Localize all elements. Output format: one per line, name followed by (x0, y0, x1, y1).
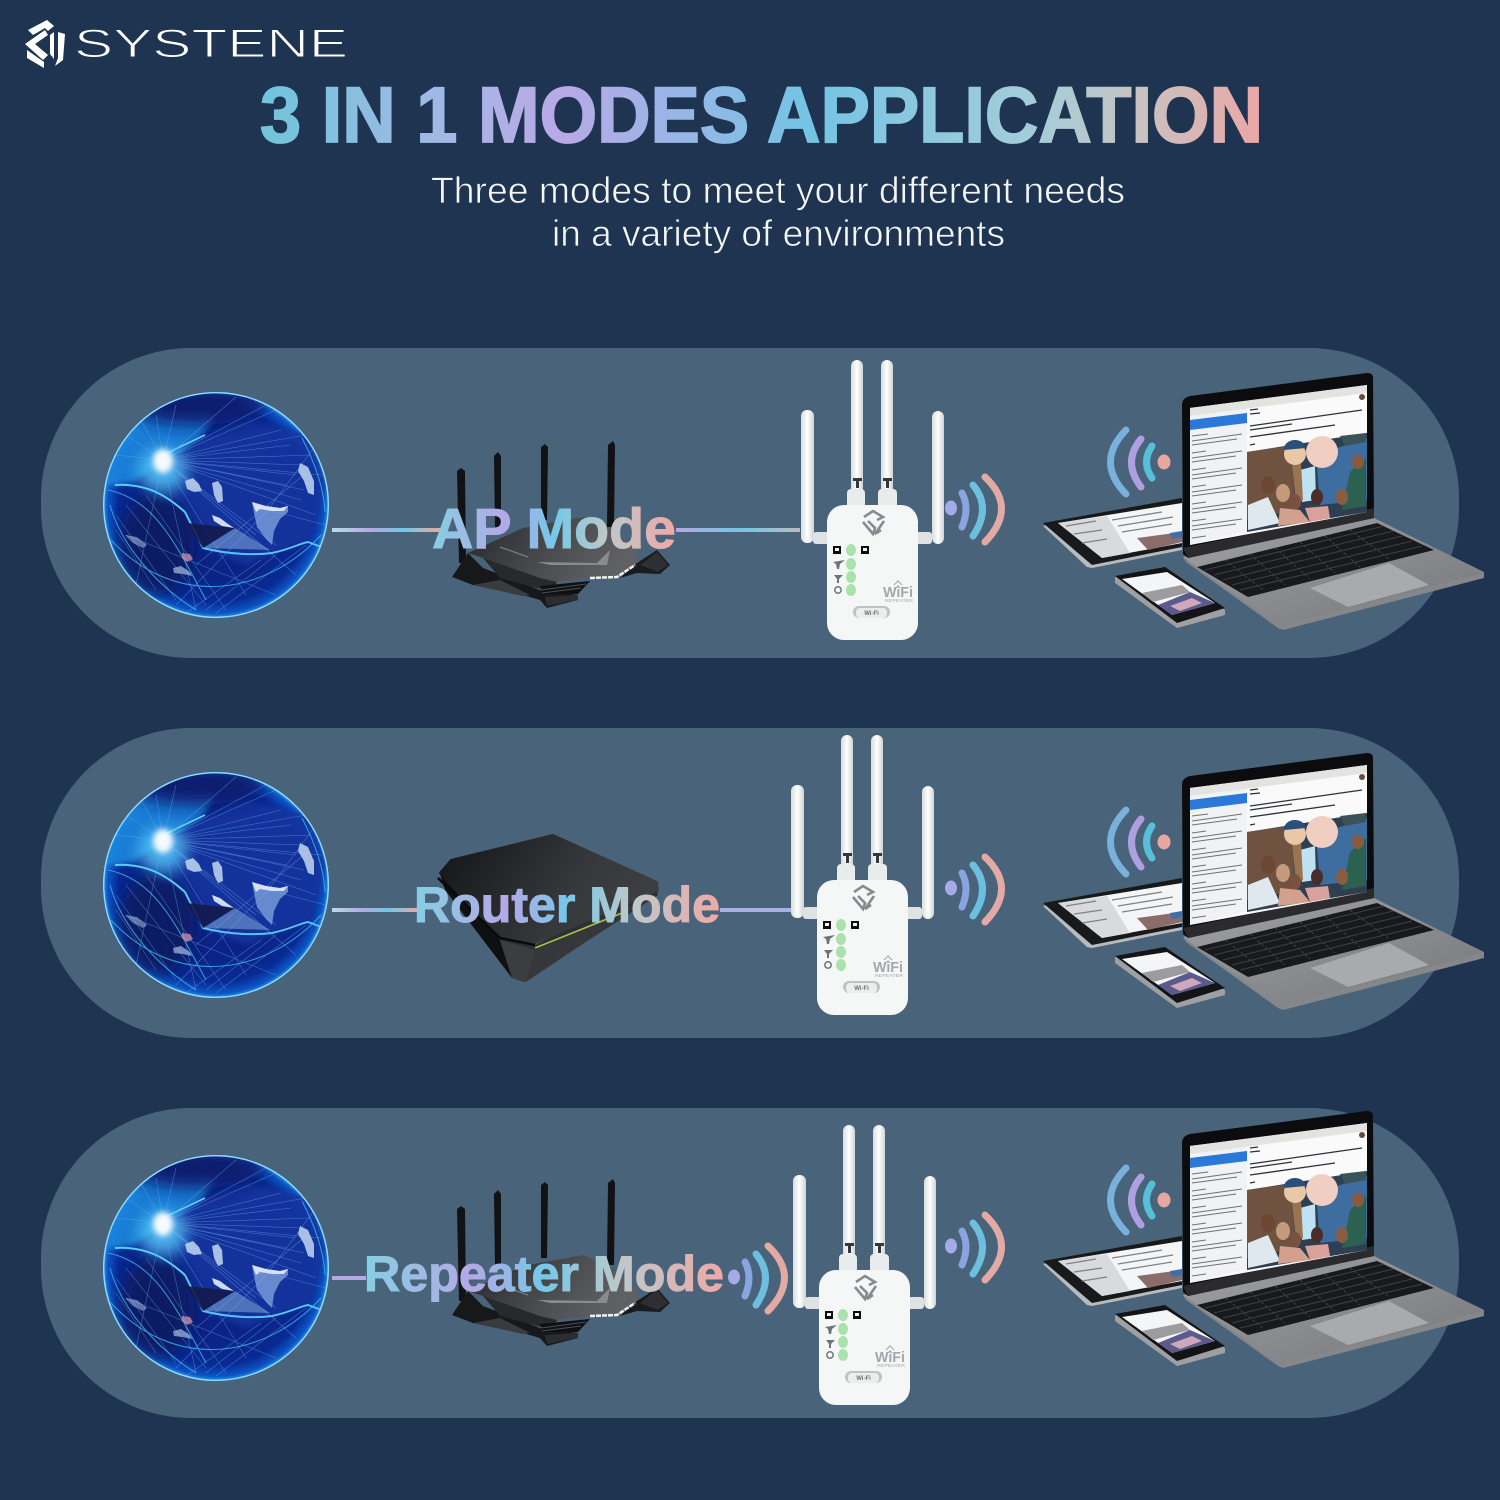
icon: router (452, 441, 670, 608)
mode label: Router Mode (414, 877, 720, 933)
icon: wifi waves right (945, 1215, 1002, 1280)
icon: wifi waves right (945, 857, 1002, 922)
icon: globe (103, 765, 329, 998)
connection line right (720, 908, 792, 912)
mode label: Repeater Mode (364, 1246, 724, 1302)
title: 3 IN 1 MODES APPLICATION (260, 70, 1263, 159)
device: wifi repeater: WiFi (883, 584, 913, 601)
device: wifi repeater (793, 1125, 936, 1405)
icon: wifi waves left (1110, 810, 1170, 874)
device: wifi repeater (801, 360, 944, 640)
icon: wifi waves left (1110, 1168, 1170, 1232)
device: wifi repeater: WiFi (873, 959, 903, 976)
device: wifi repeater: Wi-Fi (854, 986, 869, 992)
icon: globe (103, 385, 329, 618)
device: wifi repeater (791, 735, 934, 1015)
devices: laptop tablet phone (1043, 1111, 1484, 1368)
brand name: SYSTENE (74, 22, 348, 66)
mode label: AP Mode (432, 497, 676, 561)
icon: router box (438, 835, 658, 982)
subtitle: in a variety of environments (552, 213, 1005, 254)
devices: laptop tablet phone (1043, 373, 1484, 630)
icon: wifi waves left (1110, 430, 1170, 494)
subtitle (431, 170, 1125, 254)
devices: laptop tablet phone (1043, 753, 1484, 1010)
subtitle: Three modes to meet your different needs (431, 170, 1125, 211)
device: wifi repeater: WiFi (875, 1349, 905, 1366)
connection line right (676, 528, 800, 532)
icon: wifi waves right (945, 477, 1002, 542)
device: wifi repeater: REPEATER (885, 598, 914, 603)
device: wifi repeater: Wi-Fi (864, 611, 879, 617)
connection line left (332, 528, 442, 532)
connection line left (332, 908, 418, 912)
panel: AP mode (41, 348, 1484, 658)
panel: Repeater mode (41, 1108, 1484, 1418)
connection line left (332, 1276, 366, 1280)
icon: logo mark (25, 20, 65, 68)
icon: router (452, 1179, 670, 1346)
icon: globe (103, 1148, 329, 1381)
device: wifi repeater: Wi-Fi (856, 1376, 871, 1382)
panel: Router mode (41, 728, 1484, 1038)
device: wifi repeater: REPEATER (877, 1363, 906, 1368)
logo (25, 20, 348, 68)
device: wifi repeater: REPEATER (875, 973, 904, 978)
icon: wifi waves toward repeater (728, 1246, 784, 1311)
